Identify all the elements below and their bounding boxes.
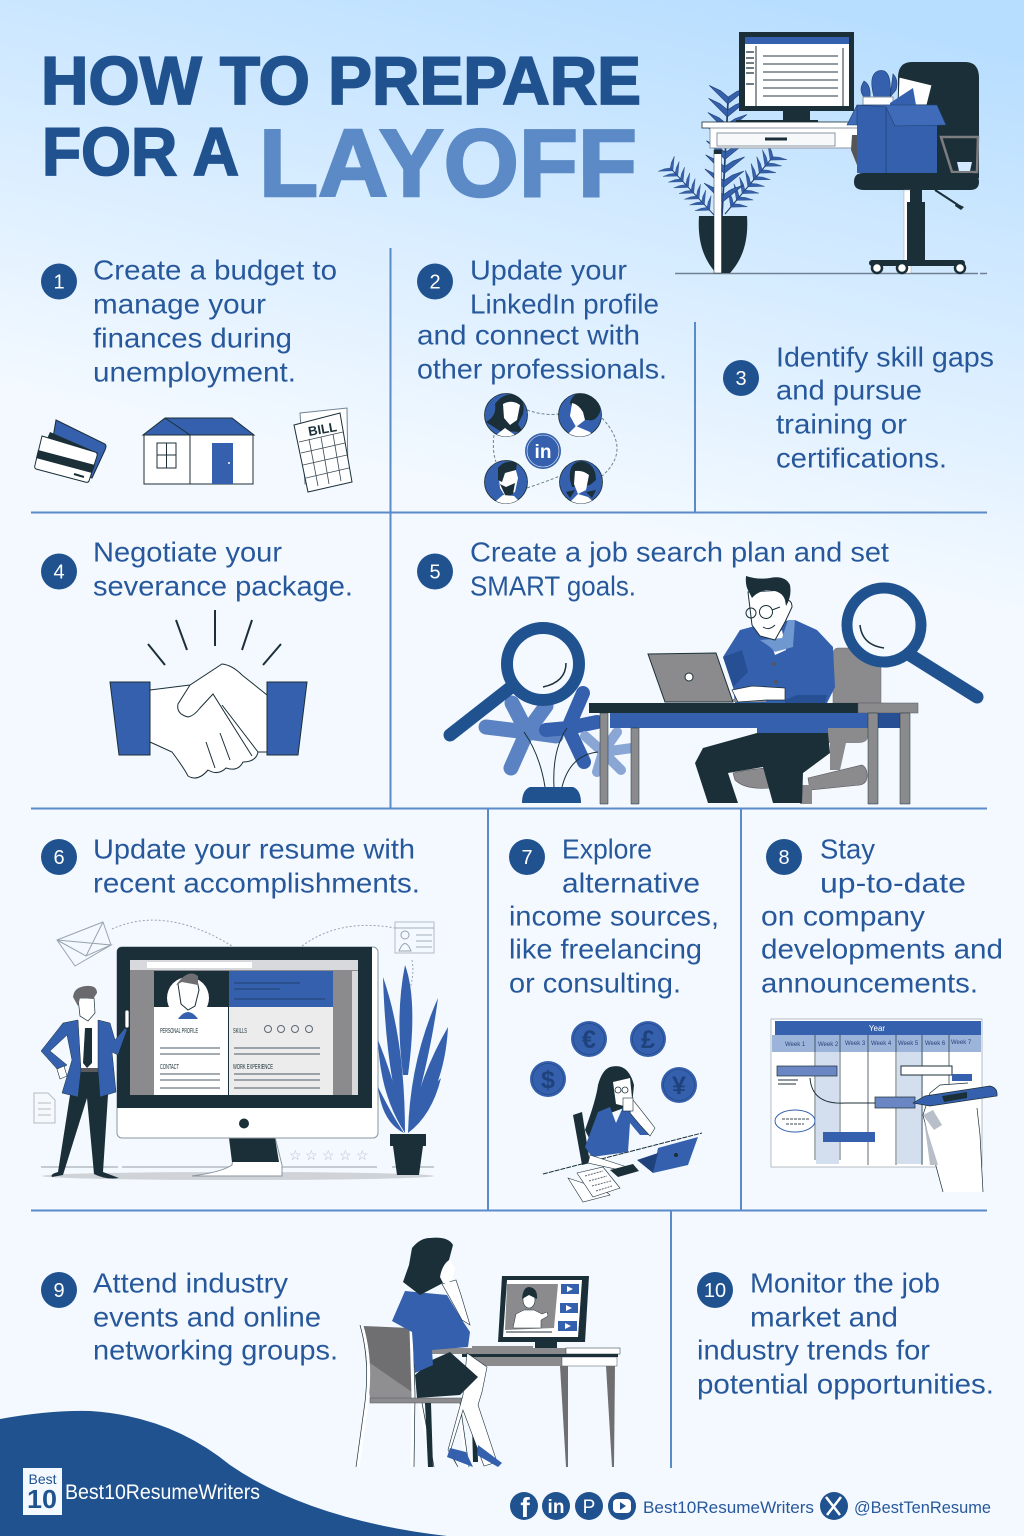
step 10: market trends: industry trends for <box>697 1335 930 1366</box>
step 2: LinkedIn: other professionals. <box>417 354 667 385</box>
illustration: woman working on laptop <box>543 1066 702 1202</box>
illustration: resume on monitor: ☆ <box>305 1147 318 1163</box>
icon: youtube <box>608 1492 636 1520</box>
icon: house <box>143 418 254 484</box>
step 7: income sources: or consulting. <box>509 968 681 999</box>
illustration: resume on monitor: SKILLS <box>233 1028 247 1035</box>
illustration: gantt chart with hand <box>771 1019 997 1192</box>
illustration: resume on monitor <box>34 920 448 1180</box>
step 7: income sources: like freelancing <box>509 934 702 965</box>
step 6: resume: Update your resume with <box>93 834 415 865</box>
step 1: budget: manage your <box>93 289 266 320</box>
icon: facebook: f <box>520 1492 530 1523</box>
step 7: income sources: income sources, <box>509 901 719 932</box>
illustration: resume on monitor: PERSONAL PROFILE <box>160 1028 198 1035</box>
step 1: budget: Create a budget to <box>93 255 337 286</box>
step 2: LinkedIn: Update your <box>470 255 627 286</box>
network of portraits: in <box>535 442 551 463</box>
step 6: resume <box>34 834 448 1180</box>
step 4: severance: severance package. <box>93 571 353 602</box>
step 7: income sources <box>509 834 719 1202</box>
illustration: resume on monitor: CONTACT <box>160 1064 179 1071</box>
step 4: severance: Negotiate your <box>93 537 282 568</box>
step 6: resume: recent accomplishments. <box>93 868 420 899</box>
step 2: LinkedIn: and connect with <box>417 320 640 351</box>
step 3: skills: and pursue <box>776 375 922 406</box>
illustration: gantt chart with hand: Week 3 <box>845 1041 866 1047</box>
step 6: resume: 6 <box>53 847 65 869</box>
illustration: gantt chart with hand: Week 4 <box>871 1041 892 1047</box>
step 3: skills: certifications. <box>776 443 947 474</box>
title: HOW TO PREPARE <box>41 43 641 119</box>
social media links: @BestTenResume <box>854 1498 991 1517</box>
step 3: skills: Identify skill gaps <box>776 342 994 373</box>
step 5: job search plan: Create a job search plan and set <box>470 537 889 568</box>
title: LAYOFF <box>259 110 637 217</box>
step 9: networking: 9 <box>53 1280 65 1302</box>
icon: currency coins: ¥ <box>672 1072 686 1100</box>
step 5: job search plan: SMART goals. <box>470 571 636 602</box>
illustration: gantt chart with hand: Week 2 <box>818 1042 839 1048</box>
footer brand panel <box>0 1411 447 1536</box>
illustration: gantt chart with hand: Week 5 <box>898 1041 919 1047</box>
illustration: resume on monitor: ☆ <box>289 1147 302 1163</box>
icon: bills <box>294 408 352 492</box>
icon: currency coins <box>530 1021 697 1103</box>
icon: currency coins: € <box>582 1026 596 1054</box>
icon: currency coins: $ <box>541 1066 555 1094</box>
footer brand panel: Best10ResumeWriters <box>65 1481 260 1504</box>
step 9: networking: Attend industry <box>93 1268 288 1299</box>
step 7: income sources: alternative <box>562 868 700 899</box>
illustration: resume on monitor: ☆ <box>339 1147 352 1163</box>
step 10: market trends: Monitor the job <box>750 1268 940 1299</box>
illustration: gantt chart with hand: Week 7 <box>951 1040 972 1046</box>
icon: linkedin <box>542 1492 570 1520</box>
illustration: resume on monitor: WORK EXPERIENCE <box>233 1064 273 1071</box>
icon: credit cards <box>35 420 106 482</box>
logo: Best <box>28 1471 57 1487</box>
step 9: networking <box>41 1238 620 1467</box>
step 10: market trends <box>697 1268 994 1400</box>
step 2: LinkedIn: LinkedIn profile <box>470 289 659 320</box>
step 7: income sources: 7 <box>521 847 533 869</box>
logo: 10 <box>27 1484 57 1514</box>
icon: facebook <box>510 1492 538 1523</box>
step 8: company updates <box>761 834 1003 1192</box>
icon: bills: BILL <box>307 419 338 439</box>
step 2: LinkedIn <box>417 255 667 506</box>
step 1: budget: finances during <box>93 323 292 354</box>
step 1: budget <box>35 255 352 492</box>
step 4: severance <box>41 537 353 778</box>
step 8: company updates: Stay <box>820 834 875 865</box>
icon: pinterest: P <box>583 1497 595 1518</box>
step 8: company updates: 8 <box>778 847 790 869</box>
step 9: networking: networking groups. <box>93 1335 338 1366</box>
step 4: severance: 4 <box>53 562 65 584</box>
icon: linkedin: in <box>548 1497 564 1518</box>
social media links: Best10ResumeWriters <box>643 1498 814 1517</box>
step 10: market trends: 10 <box>704 1280 726 1302</box>
illustration: woman on video call <box>356 1238 620 1467</box>
step 3: skills: training or <box>776 409 907 440</box>
illustration: resume on monitor: ☆ <box>322 1147 335 1163</box>
step 7: income sources: Explore <box>562 834 652 865</box>
illustration: office desk with packed box <box>658 32 987 274</box>
step 8: company updates: up-to-date <box>820 868 966 899</box>
network of portraits <box>484 392 617 506</box>
icon: pinterest <box>575 1492 603 1520</box>
step 10: market trends: market and <box>750 1302 898 1333</box>
step 1: budget: unemployment. <box>93 357 296 388</box>
step 10: market trends: potential opportunities. <box>697 1369 994 1400</box>
illustration: gantt chart with hand: Year <box>869 1024 885 1033</box>
icon: X <box>820 1492 848 1520</box>
step 9: networking: events and online <box>93 1302 321 1333</box>
step 5: job search plan <box>417 537 977 804</box>
logo <box>23 1468 62 1515</box>
step 8: company updates: developments and <box>761 934 1003 965</box>
icon: handshake <box>110 610 307 778</box>
step 3: skills: 3 <box>735 368 747 390</box>
illustration: man at laptop with magnifiers <box>450 576 977 804</box>
social media links <box>510 1492 991 1523</box>
step 3: skills <box>723 342 994 474</box>
icon: currency coins: £ <box>641 1026 655 1054</box>
illustration: gantt chart with hand: Week 6 <box>925 1041 946 1047</box>
illustration: resume on monitor: ☆ <box>356 1147 369 1163</box>
step 8: company updates: announcements. <box>761 968 978 999</box>
illustration: gantt chart with hand: Week 1 <box>785 1042 806 1048</box>
title <box>41 43 641 217</box>
step 2: LinkedIn: 2 <box>429 272 441 294</box>
step 8: company updates: on company <box>761 901 925 932</box>
title: FOR A <box>42 114 239 190</box>
step 1: budget: 1 <box>53 272 65 294</box>
step 5: job search plan: 5 <box>429 562 441 584</box>
